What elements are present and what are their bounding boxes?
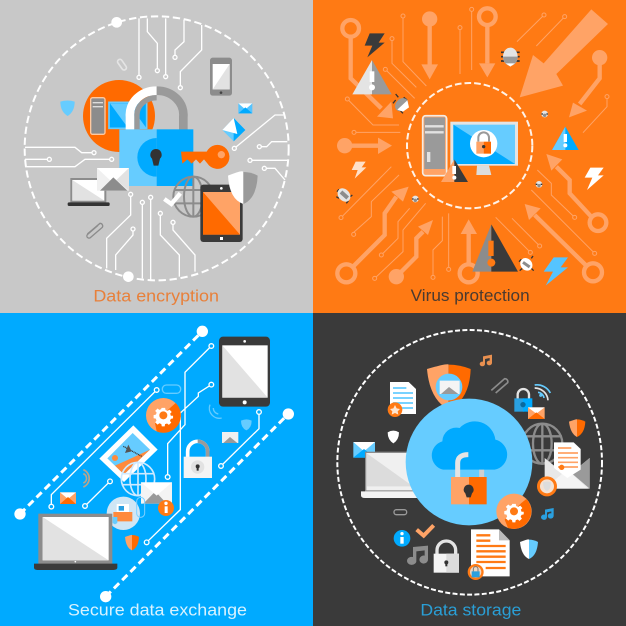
dashed circle <box>337 330 602 595</box>
icon: laptop <box>361 452 426 498</box>
icon: music note blue <box>541 508 554 520</box>
icon: cloud <box>432 421 507 470</box>
icon: bolt white right <box>585 168 604 190</box>
lock body <box>119 129 157 186</box>
label: Data storage <box>420 600 521 619</box>
icon: bug bottom <box>518 256 535 273</box>
label: Virus protection <box>411 286 530 305</box>
panel: data encryption <box>0 0 313 313</box>
icon: document <box>388 382 416 417</box>
icon: paperclip <box>491 379 508 393</box>
icon: mail blue <box>353 442 375 458</box>
icon: shield white <box>388 431 399 443</box>
icon: paperclip bottom <box>87 223 103 238</box>
icon: mail right <box>222 432 238 443</box>
icon: shield badge <box>537 476 557 496</box>
circuit lines <box>25 18 287 280</box>
icon: shield orange <box>569 419 585 437</box>
dashed line nodes <box>14 326 294 602</box>
icon: shield white blue <box>520 539 538 559</box>
icon: large document <box>471 529 510 576</box>
icon: globe <box>522 424 562 464</box>
panel: virus protection <box>313 0 626 313</box>
icon: paperclip top <box>117 58 127 71</box>
arrow heads and dots <box>337 11 607 284</box>
icon: mail <box>97 168 129 191</box>
dashed circle <box>407 83 532 208</box>
icon: bolt blue <box>544 257 568 286</box>
icon: orange mail <box>528 407 545 419</box>
icon: warning blue <box>552 127 579 150</box>
icon: music note grey <box>407 546 428 565</box>
icon: phone <box>210 58 232 96</box>
keyhole <box>150 149 162 166</box>
icon: paperclip middle <box>137 497 145 517</box>
panel: data storage <box>313 313 626 626</box>
dashed lines <box>20 331 288 597</box>
icon: laptop <box>34 514 117 570</box>
icon: padlock <box>451 455 487 504</box>
icon: wifi <box>535 385 550 400</box>
icon: large warning <box>472 224 518 272</box>
icon: globe <box>121 462 155 496</box>
icon: lock badge <box>468 564 484 580</box>
icon: key <box>181 145 229 169</box>
label: Secure data exchange <box>68 600 247 619</box>
icon: warning white <box>352 60 392 94</box>
icon: document badge <box>107 497 140 530</box>
icon: bug <box>392 94 411 114</box>
icon: photo <box>99 425 158 482</box>
icon: shield with mail <box>427 364 471 410</box>
icon: envelope with document <box>545 442 590 489</box>
icon: server tower <box>423 116 447 176</box>
icon: globe <box>173 177 213 217</box>
icon: padlock <box>184 441 212 478</box>
icon: wifi <box>209 405 222 418</box>
dashed circle <box>25 16 289 280</box>
orange circle with computer <box>83 80 155 152</box>
icon: small bugs <box>412 111 548 202</box>
thin circuit lines <box>339 7 609 280</box>
icon: gear badge <box>496 494 532 529</box>
icon: tablet <box>219 337 270 407</box>
icon: white padlock <box>434 541 459 573</box>
icon: info badge <box>394 530 410 547</box>
icon: shield <box>241 419 252 430</box>
icon: music note top <box>480 355 492 366</box>
icon: small mail <box>238 103 252 113</box>
icon: mail orange <box>60 492 76 504</box>
icon: bolt white left <box>352 162 366 179</box>
icon: check <box>417 525 434 536</box>
icon: tablet <box>200 185 243 242</box>
icon: shield left <box>60 100 75 116</box>
big arrow <box>520 9 608 97</box>
icon: shield right <box>228 171 258 204</box>
circle nodes <box>111 17 134 282</box>
icon: blue padlock <box>514 389 532 412</box>
icon: check <box>164 193 180 204</box>
icon: warning in center <box>441 159 468 182</box>
icon: bolt dark <box>365 33 385 57</box>
icon: envelope <box>141 482 172 504</box>
thick circuit arrows <box>337 8 606 282</box>
panel: secure data exchange <box>0 313 313 626</box>
icon: laptop <box>68 178 110 206</box>
padlock <box>119 91 193 186</box>
cloud circle <box>406 399 532 525</box>
icon: paperclip <box>162 385 181 393</box>
icon: diamond mail <box>222 118 245 141</box>
label: Data encryption <box>93 287 219 306</box>
icon: wifi orange <box>83 470 89 487</box>
icon: gear badge <box>146 398 181 433</box>
circuit lines <box>49 344 261 545</box>
icon: info badge <box>158 500 174 516</box>
icon: bug top <box>501 48 520 67</box>
icon: monitor with lock <box>450 122 518 175</box>
icon: paperclip small <box>394 510 407 515</box>
icon: shield orange <box>125 535 139 550</box>
shackle <box>130 91 183 131</box>
icon: bug left <box>335 186 353 204</box>
